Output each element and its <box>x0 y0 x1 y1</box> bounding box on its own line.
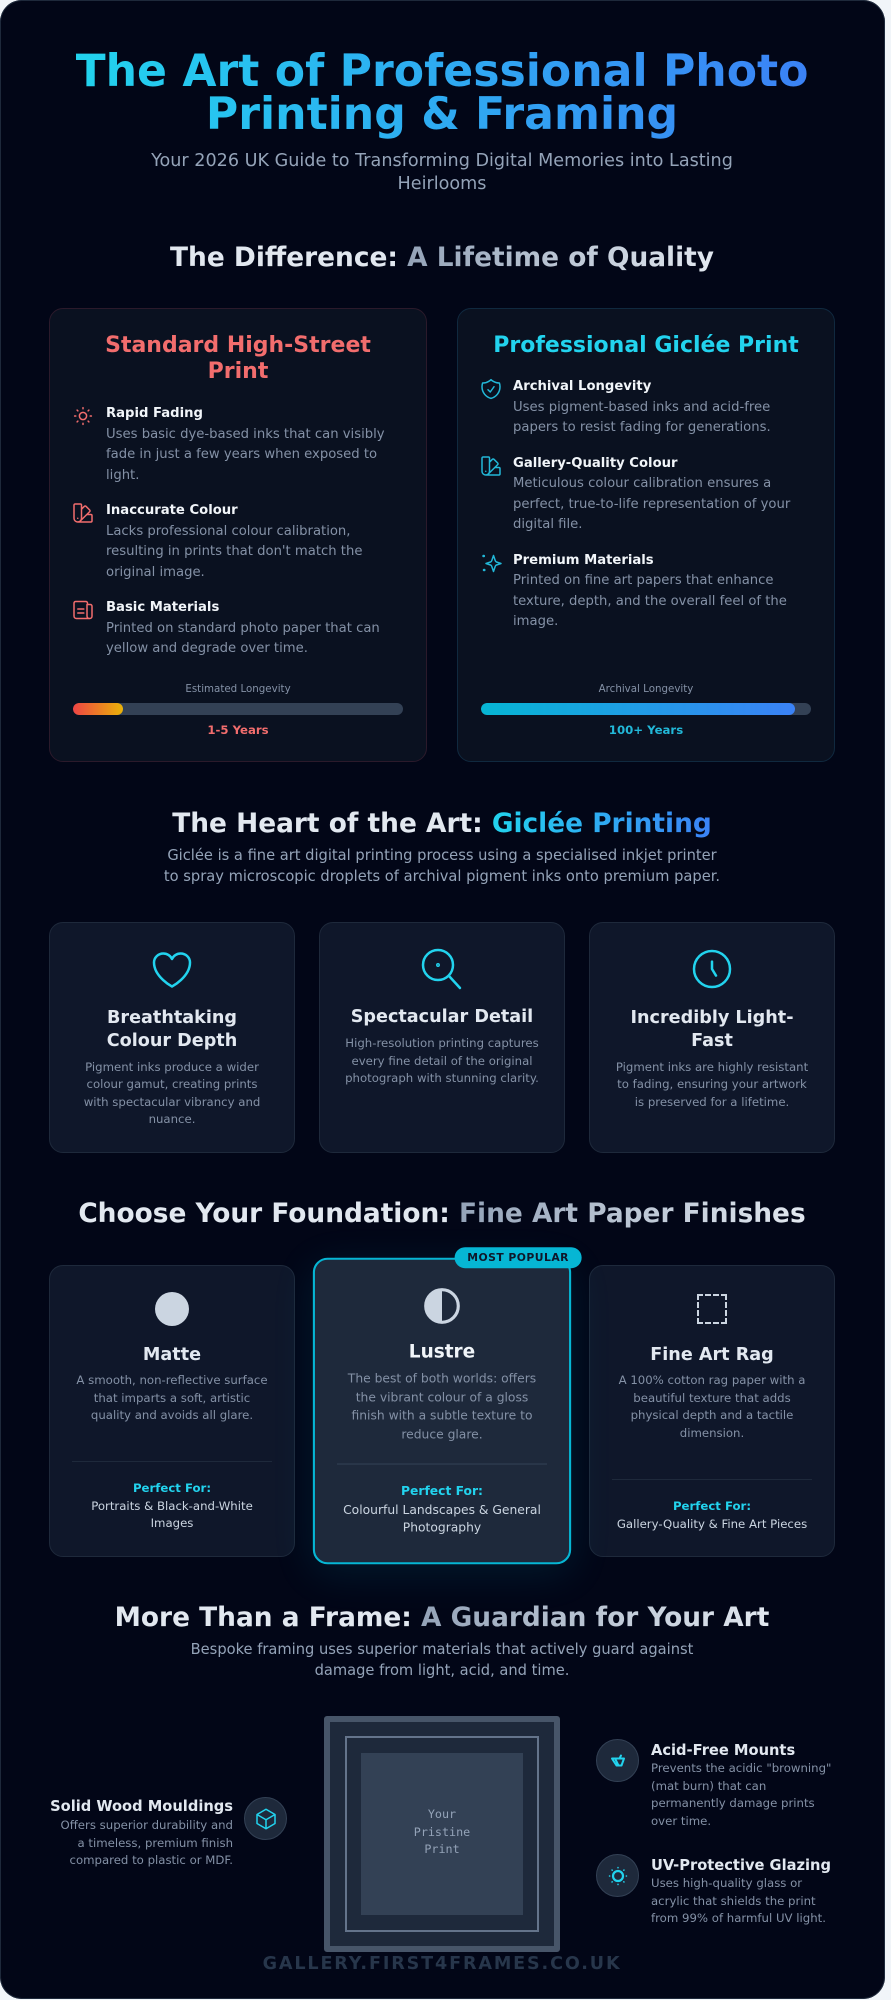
feature text: a timeless, premium finish <box>77 1836 233 1850</box>
icon: half circle <box>424 1288 460 1324</box>
panel heading: Print <box>208 358 268 384</box>
longevity bar <box>73 703 403 715</box>
icon: heart <box>152 952 192 988</box>
card text: the vibrant colour of a gloss <box>356 1390 528 1404</box>
intro text: giclee: to spray microscopic droplets of archival pigment inks onto premium paper. <box>164 868 720 884</box>
item title: Premium Materials <box>513 552 654 568</box>
feature text: acrylic that shields the print <box>651 1894 816 1908</box>
card title <box>630 1008 794 1051</box>
icon: uv sun <box>596 1854 639 1897</box>
item text: Printed on fine art papers that enhance <box>513 573 774 588</box>
title: The Art of Professional Photo <box>76 46 808 96</box>
item text <box>106 621 380 656</box>
item text: texture, depth, and the overall feel of the <box>513 594 787 609</box>
card title <box>107 1008 237 1051</box>
card text: every fine detail of the original <box>351 1054 533 1068</box>
card text: High-resolution printing captures <box>345 1036 539 1050</box>
card text <box>616 1060 808 1109</box>
item text: Meticulous colour calibration ensures a <box>513 476 771 491</box>
feature text: compared to plastic or MDF. <box>70 1853 233 1867</box>
print: Print <box>424 1842 460 1856</box>
item text: light. <box>106 468 139 483</box>
feature title: Solid Wood Mouldings <box>50 1798 233 1815</box>
card text: is preserved for a lifetime. <box>635 1095 789 1109</box>
feature text <box>651 1760 831 1830</box>
longevity value: 100+ Years <box>609 723 683 737</box>
item text: digital file. <box>513 517 582 532</box>
card: matte <box>49 1265 295 1557</box>
panel heading <box>105 333 371 384</box>
item text: Uses pigment-based inks and acid-free <box>513 400 770 415</box>
item text: Uses basic dye-based inks that can visibly <box>106 427 385 442</box>
intro text: giclee <box>164 847 720 884</box>
card text: to fading, ensuring your artwork <box>617 1077 807 1091</box>
item text <box>106 524 362 580</box>
item title: Inaccurate Colour <box>106 503 238 518</box>
longevity bar <box>481 703 811 715</box>
item text: resulting in prints that don't match the <box>106 544 362 559</box>
panel: giclee print <box>457 308 835 762</box>
item text <box>106 427 385 483</box>
badge: most popular <box>455 1247 582 1268</box>
item text: original image. <box>106 565 205 580</box>
card text: dimension. <box>680 1426 744 1440</box>
recommendation: Photography <box>403 1520 481 1535</box>
footer url: GALLERY.FIRST4FRAMES.CO.UK <box>263 1954 621 1974</box>
card text: nuance. <box>149 1112 195 1126</box>
mount line <box>345 1736 539 1932</box>
card: lustre <box>313 1258 571 1564</box>
icon: solid circle <box>155 1292 189 1326</box>
badge: most popular: MOST POPULAR <box>467 1251 569 1264</box>
item text <box>513 400 771 435</box>
recommendation <box>343 1483 541 1535</box>
item text: Lacks professional colour calibration, <box>106 524 350 539</box>
item: inaccurate colour <box>73 503 362 580</box>
subtitle: Heirlooms <box>398 174 486 194</box>
card: light-fast <box>589 922 835 1153</box>
intro text: framing <box>0 1640 884 1681</box>
framed print diagram <box>324 1716 560 1952</box>
card text: Pigment inks produce a wider <box>85 1060 259 1074</box>
card: colour depth <box>49 922 295 1153</box>
card title: Matte <box>143 1345 201 1365</box>
feature: acid-free mounts <box>596 1739 876 1834</box>
title: Printing & Framing <box>206 89 678 140</box>
card text: reduce glare. <box>401 1427 483 1441</box>
card title: Lustre <box>409 1342 475 1363</box>
item text <box>513 573 787 629</box>
feature text: over time. <box>651 1814 711 1828</box>
recommendation: Gallery-Quality & Fine Art Pieces <box>617 1517 807 1531</box>
heading: framing: More Than a Frame: A Guardian for Your Art <box>115 1602 769 1633</box>
card title: Fast <box>691 1031 733 1051</box>
card text: photograph with stunning clarity. <box>345 1071 539 1085</box>
item text <box>513 476 790 532</box>
recommendation <box>617 1499 807 1531</box>
card text: quality and avoids all glare. <box>91 1408 253 1422</box>
item text: perfect, true-to-life representation of your <box>513 497 790 512</box>
card text: beautiful texture that adds <box>633 1391 791 1405</box>
icon: swatch <box>73 503 93 523</box>
item title: Rapid Fading <box>106 406 203 421</box>
feature text: Uses high-quality glass or <box>651 1876 802 1890</box>
card: spectacular detail <box>319 922 565 1153</box>
icon: sun <box>74 406 92 426</box>
title <box>76 46 808 140</box>
heading: the difference: The Difference: A Lifetime of Quality <box>170 242 714 273</box>
recommendation: Images <box>151 1516 193 1530</box>
card title: Breathtaking <box>107 1008 237 1028</box>
feature text: from 99% of harmful UV light. <box>651 1911 826 1925</box>
item text: image. <box>513 614 558 629</box>
intro text: framing: Bespoke framing uses superior materials that actively guard against <box>191 1641 693 1658</box>
card text: A 100% cotton rag paper with a <box>619 1373 805 1387</box>
feature text: Offers superior durability and <box>60 1818 233 1832</box>
card title: Colour Depth <box>107 1031 237 1051</box>
print <box>361 1753 523 1915</box>
card text <box>348 1371 536 1441</box>
item: premium materials <box>482 552 787 629</box>
divider <box>337 1464 547 1465</box>
card text: The best of both worlds: offers <box>348 1371 536 1386</box>
icon: document <box>73 600 93 620</box>
longevity label: Archival Longevity <box>599 683 693 695</box>
panel heading: Professional Giclée Print <box>493 333 799 358</box>
icon: magnifier <box>422 948 462 990</box>
card text <box>345 1036 539 1085</box>
icon: sparkles <box>482 554 502 572</box>
recommendation: Perfect For: <box>133 1481 211 1495</box>
card text <box>84 1060 260 1126</box>
divider <box>72 1461 272 1462</box>
recommendation <box>91 1481 253 1530</box>
icon: mount <box>596 1739 639 1782</box>
icon: swatch <box>481 456 501 476</box>
card title: Incredibly Light- <box>630 1008 794 1028</box>
feature: uv glazing <box>596 1854 876 1934</box>
card text: with spectacular vibrancy and <box>84 1095 260 1109</box>
card text: A smooth, non-reflective surface <box>76 1373 268 1387</box>
divider <box>612 1479 812 1480</box>
recommendation: Colourful Landscapes & General <box>343 1502 541 1517</box>
item: archival longevity <box>481 378 771 435</box>
feature text <box>60 1817 233 1870</box>
card title: Fine Art Rag <box>650 1345 774 1365</box>
intro text: framing: damage from light, acid, and time. <box>315 1662 569 1678</box>
item text: papers to resist fading for generations. <box>513 420 771 435</box>
recommendation: Perfect For: <box>673 1499 751 1513</box>
icon: shield <box>481 378 501 400</box>
item title: Archival Longevity <box>513 379 651 394</box>
card text <box>76 1373 268 1422</box>
icon: clock <box>692 950 732 988</box>
card text: that imparts a soft, artistic <box>94 1391 250 1405</box>
heading: giclee: The Heart of the Art: Giclée Printing <box>172 808 712 839</box>
icon: cube <box>244 1797 287 1840</box>
print: Your <box>428 1807 456 1821</box>
feature title: UV-Protective Glazing <box>651 1857 831 1874</box>
item text: fade in just a few years when exposed to <box>106 447 377 462</box>
feature text: (mat burn) that can <box>651 1779 766 1793</box>
heading: paper finishes: Choose Your Foundation: Fine Art Paper Finishes <box>78 1198 806 1229</box>
longevity value: 1-5 Years <box>207 723 269 737</box>
intro text: giclee: Giclée is a fine art digital printing process using a specialised inkjet printer <box>167 847 717 864</box>
card: fine art rag <box>589 1265 835 1557</box>
card title: Spectacular Detail <box>351 1007 533 1027</box>
feature text: Prevents the acidic "browning" <box>651 1761 831 1775</box>
longevity label: Estimated Longevity <box>185 683 291 695</box>
panel: standard print <box>49 308 427 762</box>
icon: dashed square <box>697 1294 727 1324</box>
feature: solid wood <box>40 1798 288 1870</box>
card text: physical depth and a tactile <box>631 1408 793 1422</box>
subtitle <box>151 151 733 194</box>
item text: Printed on standard photo paper that can <box>106 621 380 636</box>
subtitle: Your 2026 UK Guide to Transforming Digital Memories into Lasting <box>151 151 733 171</box>
item: rapid fading <box>74 406 385 483</box>
recommendation: Perfect For: <box>401 1483 483 1498</box>
recommendation: Portraits & Black-and-White <box>91 1499 253 1513</box>
print: Pristine <box>414 1825 470 1839</box>
item title: Gallery-Quality Colour <box>513 456 678 470</box>
feature title: Acid-Free Mounts <box>651 1742 795 1759</box>
card text: finish with a subtle texture to <box>351 1408 532 1423</box>
item text: yellow and degrade over time. <box>106 641 308 656</box>
item: gallery colour <box>481 456 790 532</box>
card text <box>618 1373 805 1440</box>
item title: Basic Materials <box>106 600 219 615</box>
item: basic materials <box>73 600 380 656</box>
card text: Pigment inks are highly resistant <box>616 1060 808 1074</box>
panel heading: Standard High-Street <box>105 333 371 358</box>
feature text: permanently damage prints <box>651 1796 815 1810</box>
feature text <box>651 1875 826 1928</box>
card text: colour gamut, creating prints <box>86 1077 258 1091</box>
